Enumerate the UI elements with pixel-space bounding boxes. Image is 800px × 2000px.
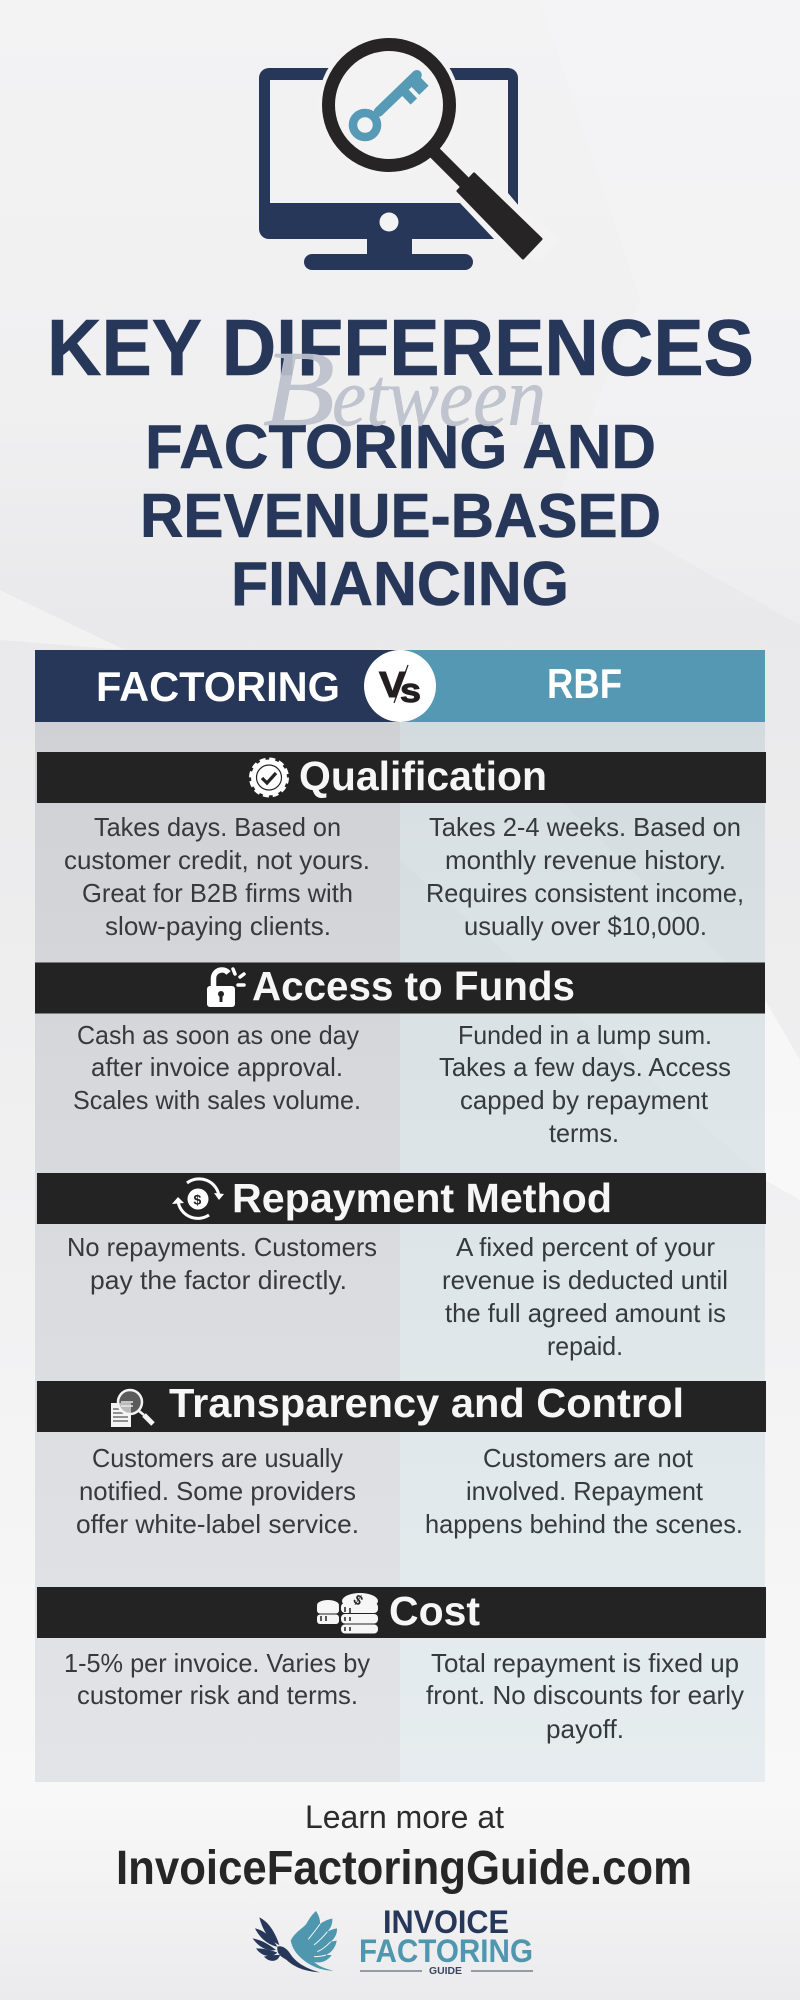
badge: vs: V — [379, 664, 406, 705]
heading bar: cost: Cost — [389, 1588, 480, 1634]
text: factoring access: after invoice approval. — [91, 1052, 343, 1082]
text: rbf repayment — [442, 1232, 728, 1361]
text: factoring cost: customer risk and terms. — [77, 1680, 358, 1710]
text: rbf transparency — [425, 1443, 743, 1539]
icon: coin stacks: $ — [350, 1591, 366, 1609]
text: factoring qualification: Takes days. Based on — [94, 812, 341, 842]
text: rbf cost: front. No discounts for early — [426, 1680, 744, 1710]
icon: money cycle — [172, 1179, 224, 1218]
logo wordmark: FACTORING — [359, 1933, 533, 1969]
text: factoring transparency — [76, 1443, 359, 1539]
text: rbf access: capped by repayment — [460, 1085, 709, 1115]
logo wordmark: GUIDE — [429, 1966, 462, 1977]
title: FINANCING — [231, 550, 569, 619]
text: rbf repayment: the full agreed amount is — [445, 1298, 726, 1328]
panel: repayment method — [37, 1173, 766, 1361]
badge: vs — [364, 650, 436, 722]
text: rbf repayment: repaid. — [547, 1331, 623, 1361]
text: rbf qualification: Requires consistent income, — [426, 878, 744, 908]
panel: cost — [37, 1587, 766, 1744]
icon: coin stacks — [317, 1591, 378, 1634]
text: rbf access — [439, 1020, 731, 1148]
logo wordmark — [359, 1904, 533, 1977]
text: factoring access — [73, 1020, 361, 1115]
text: factoring cost — [64, 1648, 370, 1710]
label: factoring: FACTORING — [96, 663, 340, 710]
text: rbf qualification: usually over $10,000. — [464, 911, 707, 941]
text: factoring access: Cash as soon as one day — [77, 1020, 359, 1050]
text: rbf cost — [426, 1648, 744, 1744]
title: REVENUE-BASED — [140, 482, 661, 551]
badge: vs: s — [400, 672, 421, 710]
title: KEY DIFFERENCES — [47, 303, 754, 392]
heading bar: repayment method — [37, 1173, 766, 1224]
icon: monitor with magnifying glass and key — [259, 34, 560, 270]
text: rbf repayment: revenue is deducted until — [442, 1265, 728, 1295]
heading bar: qualification: Qualification — [299, 753, 547, 799]
text: rbf access: Funded in a lump sum. — [458, 1020, 712, 1050]
heading bar: repayment method: Repayment Method — [232, 1175, 612, 1221]
text: rbf access: terms. — [549, 1118, 619, 1148]
logo wordmark: INVOICE — [383, 1904, 509, 1940]
footer call to action: Learn more at — [305, 1799, 504, 1835]
panel: qualification — [37, 752, 766, 941]
label: RBF: RBF — [547, 660, 622, 707]
text: rbf cost: payoff. — [546, 1714, 624, 1744]
title — [47, 303, 754, 619]
text: factoring repayment: No repayments. Customers — [67, 1232, 377, 1262]
logo — [253, 1904, 533, 1977]
icon: open lock — [207, 969, 244, 1007]
text: factoring qualification: customer credit, not yours. — [64, 845, 370, 875]
heading bar: cost — [37, 1587, 766, 1638]
heading bar: transparency and control — [37, 1380, 766, 1432]
text: factoring repayment — [67, 1232, 377, 1295]
heading bar: access to funds — [35, 962, 765, 1014]
heading bar: access to funds: Access to Funds — [252, 963, 575, 1009]
text: factoring qualification — [64, 812, 370, 941]
comparison header — [35, 650, 765, 722]
subtitle: Between: etween — [332, 351, 546, 444]
icon: money cycle: $ — [194, 1192, 202, 1208]
text: factoring repayment: pay the factor directly. — [90, 1265, 347, 1295]
heading bar: transparency and control: Transparency and Control — [169, 1380, 684, 1426]
table background — [35, 722, 765, 1782]
text: rbf transparency: Customers are not — [483, 1443, 694, 1473]
text: factoring transparency: notified. Some providers — [79, 1476, 356, 1506]
icon: verified badge — [250, 759, 288, 796]
text: rbf transparency: involved. Repayment — [466, 1476, 704, 1506]
text: factoring transparency: offer white-label service. — [76, 1509, 359, 1539]
text: factoring transparency: Customers are usually — [92, 1443, 343, 1473]
footer call to action: InvoiceFactoringGuide.com — [116, 1842, 692, 1895]
footer call to action — [116, 1799, 692, 1895]
text: factoring cost: 1-5% per invoice. Varies by — [64, 1648, 370, 1678]
title: FACTORING AND — [145, 413, 656, 482]
heading bar: qualification — [37, 752, 766, 803]
text: rbf repayment: A fixed percent of your — [456, 1232, 715, 1262]
text: rbf transparency: happens behind the scenes. — [425, 1509, 743, 1539]
icon: eagle wings — [253, 1911, 337, 1972]
panel: access to funds — [35, 962, 765, 1148]
icon: document under magnifier — [111, 1390, 153, 1427]
panel: transparency and control — [37, 1380, 766, 1539]
text: rbf qualification: Takes 2-4 weeks. Based on — [429, 812, 741, 842]
text: factoring access: Scales with sales volume. — [73, 1085, 361, 1115]
text: factoring qualification: slow-paying clients. — [105, 911, 331, 941]
text: rbf access: Takes a few days. Access — [439, 1052, 731, 1082]
subtitle: Between: B — [263, 330, 335, 449]
text: factoring qualification: Great for B2B firms with — [82, 878, 353, 908]
text: rbf cost: Total repayment is fixed up — [431, 1648, 739, 1678]
text: rbf qualification: monthly revenue history. — [445, 845, 726, 875]
text: rbf qualification — [426, 812, 744, 941]
